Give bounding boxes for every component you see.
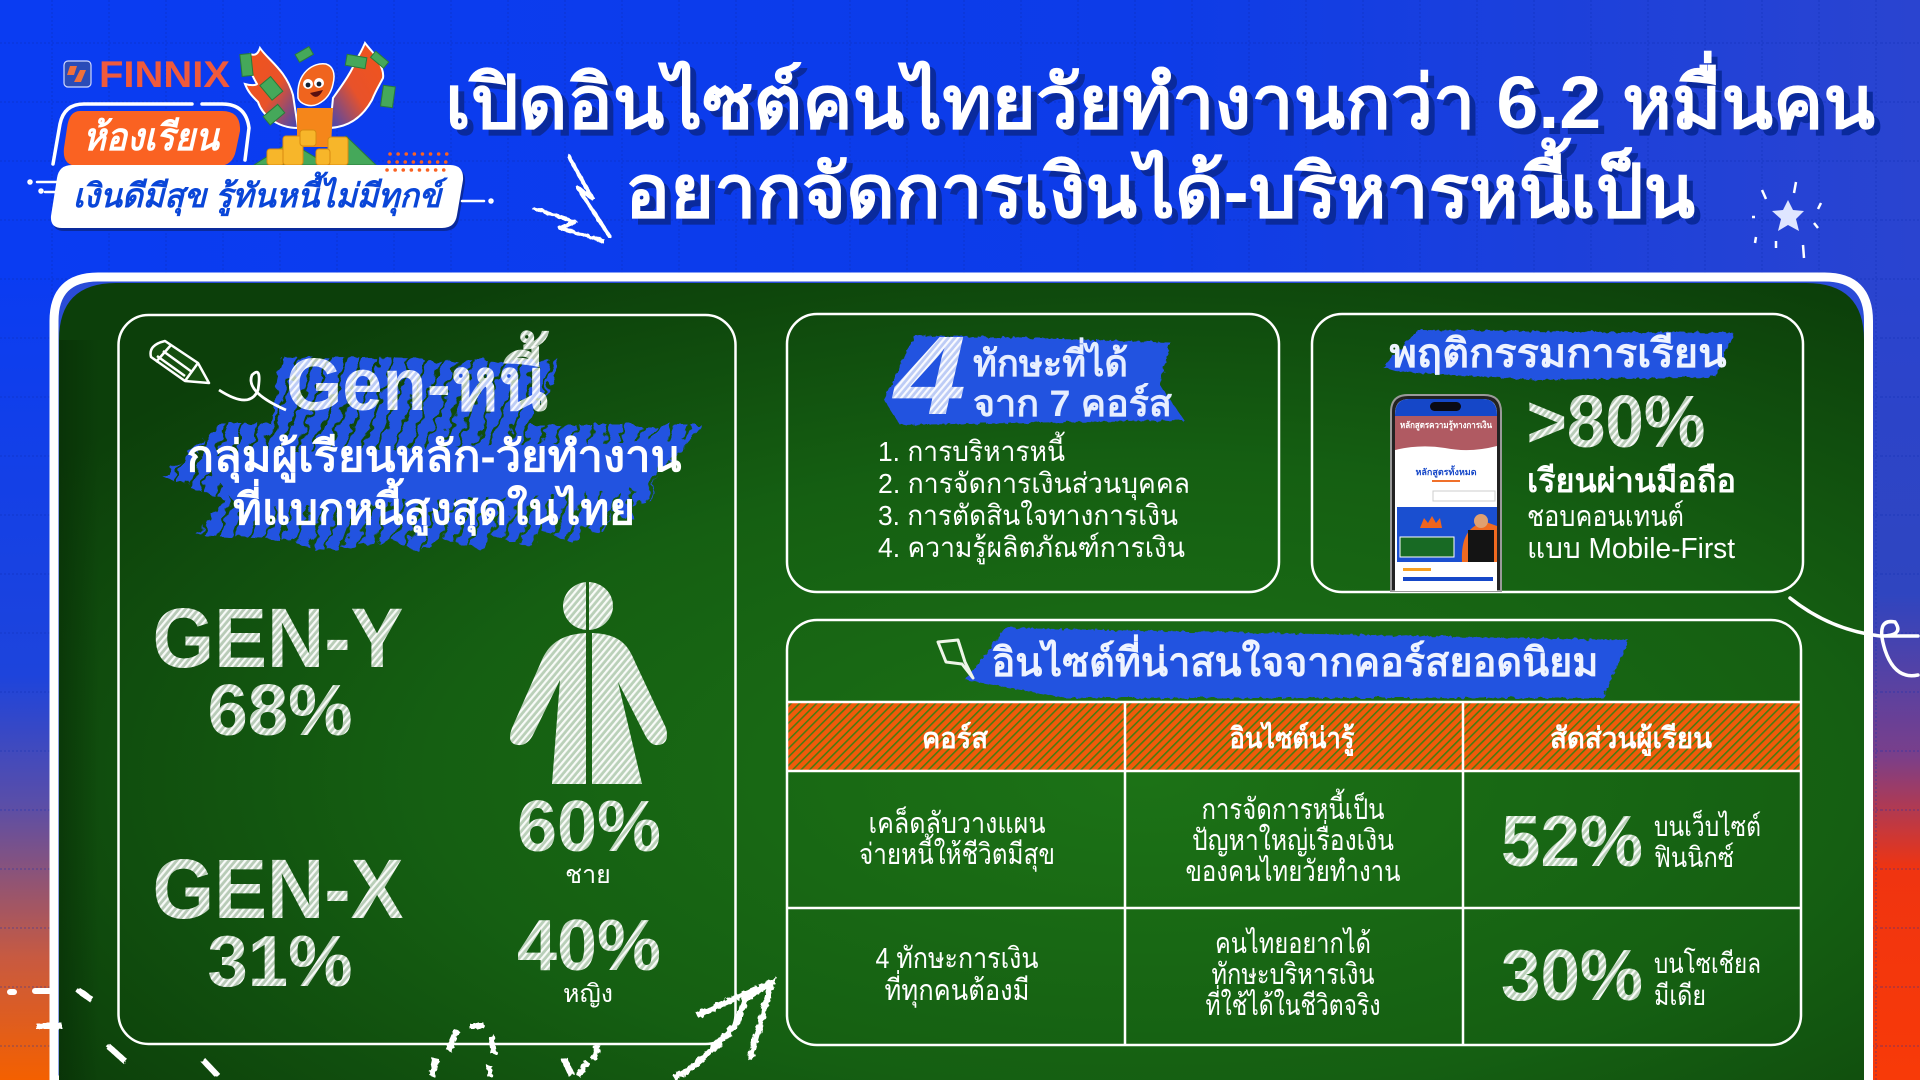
- row 2: ที่ใช้ได้ในชีวิตจริง: [1206, 985, 1380, 1022]
- logo: FINNIX: FINNIX: [99, 54, 230, 95]
- icon: person: [510, 581, 667, 785]
- subheading: ที่แบกหนี้สูงสุดในไทย: [233, 477, 635, 537]
- doodle: chalk arrow: [36, 982, 772, 1078]
- skills list: [878, 431, 1190, 565]
- heading: ทักษะที่ได้: [973, 337, 1128, 384]
- blue chalk scribble: [966, 628, 1629, 698]
- row 2: [876, 926, 1380, 1022]
- stat: GEN-X: GEN-X: [152, 842, 404, 936]
- panel: insights table: [787, 620, 1801, 1045]
- header labels: อินไซต์น่ารู้: [1230, 721, 1355, 756]
- description: ชอบคอนเทนต์: [1527, 500, 1684, 533]
- mascot: phoenix with coins and money: [240, 43, 395, 165]
- heading: พฤติกรรมการเรียน: [1390, 332, 1726, 376]
- stat: 52%: 52%: [1501, 802, 1643, 882]
- blue chalk scribble: [163, 357, 702, 552]
- header labels: คอร์ส: [922, 721, 988, 755]
- stat: >80%: >80%: [1526, 380, 1706, 463]
- stat: GEN-X: [152, 842, 404, 1002]
- stat: 52%: บนเว็บไซต์: [1654, 809, 1761, 842]
- skills list: 1. การบริหารหนี้: [878, 431, 1065, 467]
- stat: GEN-Y: GEN-Y: [152, 591, 404, 685]
- row 1: เคล็ดลับวางแผน: [868, 805, 1046, 840]
- doodle: right squiggle: [1790, 598, 1918, 676]
- blue chalk scribble: [884, 335, 1184, 425]
- table heading: อินไซต์ที่น่าสนใจจากคอร์สยอดนิยม: [992, 634, 1598, 685]
- speed lines: [28, 180, 492, 202]
- stat: 30%: 30%: [1501, 936, 1643, 1016]
- pill: ห้องเรียน: ห้องเรียน: [83, 117, 221, 159]
- heading: Gen-หนี้: Gen-หนี้: [286, 330, 549, 426]
- header labels: สัดส่วนผู้เรียน: [1550, 723, 1712, 756]
- panel: learning behaviour: [1312, 314, 1803, 592]
- stat: 60% ชาย: 60%: [517, 787, 661, 867]
- heading: [973, 337, 1172, 424]
- stat: 52%: [1501, 802, 1761, 882]
- subheading: [186, 433, 682, 537]
- row 1: ของคนไทยวัยทำงาน: [1186, 854, 1401, 888]
- tagline banner: เงินดีมีสุข รู้ทันหนี้ไม่มีทุกข์: [73, 171, 449, 217]
- chalkboard panel: [54, 277, 1868, 1080]
- icon: lightning doodle: [533, 155, 610, 241]
- big number 4: 4: [892, 313, 966, 438]
- stat: GEN-Y: 68%: [208, 671, 352, 751]
- title: เปิดอินไซต์คนไทยวัยทำงานกว่า 6.2 หมื่นคน: [445, 50, 1875, 144]
- description: แบบ Mobile-First: [1527, 533, 1735, 565]
- row 2: ที่ทุกคนต้องมี: [884, 970, 1030, 1008]
- phone: [1391, 395, 1501, 591]
- icon: pencil: [151, 341, 286, 410]
- stat: 60% ชาย: ชาย: [565, 861, 611, 889]
- subheading: กลุ่มผู้เรียนหลัก-วัยทำงาน: [186, 433, 682, 484]
- header labels: [922, 721, 1712, 756]
- stat: GEN-Y: [152, 591, 404, 751]
- panel: Gen-หนี้: [118, 315, 736, 1044]
- row 1: [859, 788, 1401, 888]
- doodle: left dashes: [10, 991, 50, 992]
- stat: 30%: บนโซเชียล: [1654, 947, 1761, 979]
- icon: star doodle: [1752, 182, 1821, 258]
- heading: จาก 7 คอร์ส: [973, 383, 1172, 424]
- panel: 4 skills: [787, 313, 1279, 592]
- phone: หลักสูตรความรู้ทางการเงิน: [1400, 420, 1493, 431]
- phone: หลักสูตรทั้งหมด: [1415, 465, 1477, 478]
- table header band: [787, 703, 1801, 770]
- tagline banner: [51, 165, 463, 228]
- skills list: 4. ความรู้ผลิตภัณฑ์การเงิน: [878, 532, 1185, 565]
- stat: 30%: มีเดีย: [1654, 980, 1706, 1011]
- row 1: การจัดการหนี้เป็น: [1202, 788, 1385, 826]
- pill: ห้องเรียน: [64, 111, 240, 166]
- table grid: [787, 620, 1801, 1045]
- tag frame line: [53, 104, 249, 164]
- description: [1527, 462, 1736, 565]
- row 1: ปัญหาใหญ่เรื่องเงิน: [1192, 820, 1394, 857]
- row 2: คนไทยอยากได้: [1215, 926, 1371, 960]
- skills list: 2. การจัดการเงินส่วนบุคคล: [878, 468, 1190, 501]
- row 2: 4 ทักษะการเงิน: [876, 943, 1039, 975]
- solid core of scribble: [200, 440, 690, 510]
- title: [445, 50, 1875, 233]
- icon: pin: [938, 640, 973, 678]
- row 1: จ่ายหนี้ให้ชีวิตมีสุข: [859, 833, 1055, 872]
- stat: 40% หญิง: หญิง: [563, 980, 613, 1008]
- stat: 30%: [1501, 936, 1761, 1016]
- stat: 52%: ฟินนิกซ์: [1654, 842, 1734, 873]
- orange dots: [387, 154, 454, 170]
- stat: 40% หญิง: 40%: [517, 906, 661, 986]
- stat: GEN-X: 31%: [208, 922, 352, 1002]
- description: เรียนผ่านมือถือ: [1527, 462, 1736, 499]
- skills list: 3. การตัดสินใจทางการเงิน: [878, 499, 1178, 531]
- title: อยากจัดการเงินได้-บริหารหนี้เป็น: [625, 137, 1695, 233]
- row 2: ทักษะบริหารเงิน: [1212, 959, 1375, 991]
- blue chalk scribble: [1383, 330, 1733, 380]
